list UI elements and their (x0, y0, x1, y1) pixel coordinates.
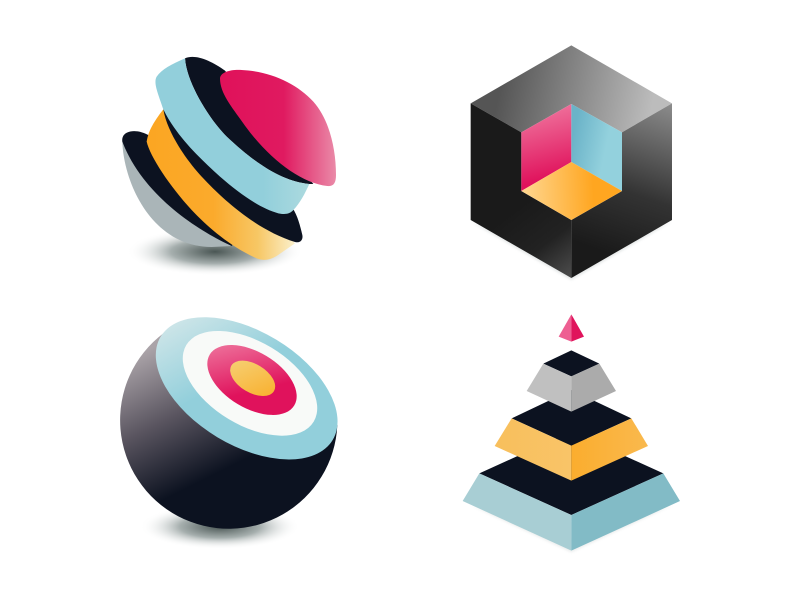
upper tier left face (527, 364, 571, 412)
cube right face (571, 103, 672, 278)
cube shadow (471, 222, 672, 280)
light blue band (155, 58, 309, 214)
inner pink wall (521, 104, 571, 191)
bottom tier (463, 432, 680, 551)
illustration: layered pyramid (463, 314, 680, 552)
upper tier (527, 350, 616, 412)
white ring (165, 309, 335, 457)
pink ring (195, 331, 309, 429)
dark sphere body, cut along the cap (120, 333, 337, 529)
ball ground shadow (140, 504, 300, 549)
cube left face (471, 103, 571, 278)
upper tier right face (571, 364, 616, 412)
apex left face (559, 314, 571, 342)
pyramid shadow (470, 505, 673, 552)
middle tier right face (571, 418, 648, 481)
pink apex (559, 314, 584, 342)
orange centre (224, 353, 281, 403)
bottom tier left face (463, 473, 571, 551)
inner orange floor (521, 162, 622, 220)
bottom tier right face (571, 473, 680, 551)
orange band (147, 109, 295, 260)
grey bottom hemisphere (122, 137, 240, 247)
apex right face (571, 314, 584, 342)
pink cap (220, 70, 336, 186)
illustration: sphere with target rings (120, 288, 362, 549)
navy lower disc (122, 131, 240, 246)
upper tier top face (543, 350, 599, 376)
navy middle disc (163, 109, 303, 242)
middle tier top face (512, 390, 631, 446)
cube top face (471, 45, 672, 132)
inner blue wall (571, 104, 622, 191)
middle tier (495, 390, 648, 481)
sphere ground shadow (127, 228, 303, 276)
bottom tier top face (479, 432, 663, 515)
outer blue ring (131, 288, 362, 489)
navy upper disc (185, 57, 313, 184)
illustration: sliced sphere (122, 57, 336, 276)
illustration: cube with cut-out corner (471, 45, 672, 280)
middle tier left face (495, 418, 571, 481)
